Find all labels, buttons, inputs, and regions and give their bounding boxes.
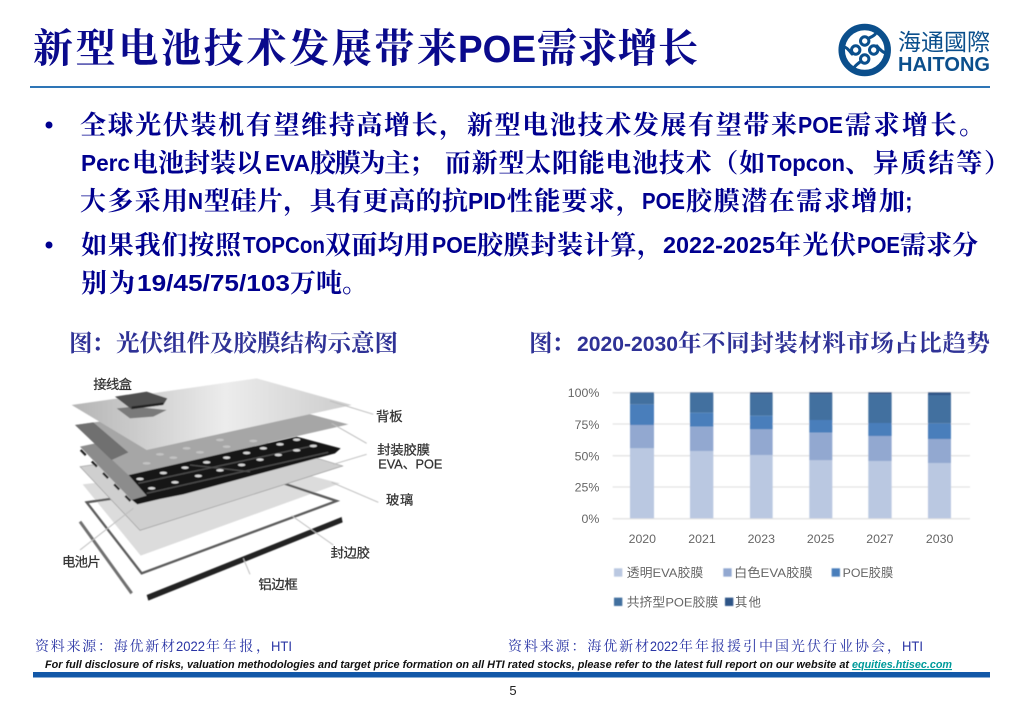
backsheet [72, 378, 352, 450]
diagram labels: 封边胶 [331, 545, 370, 561]
diagram labels: 接线盒 [93, 376, 132, 392]
bullet 2 [46, 230, 978, 298]
legend labels: 其他 [735, 595, 761, 609]
stacked bar chart [568, 386, 970, 609]
bullet 1: 而新型太阳能电池技术（如 [445, 148, 765, 178]
logo: Haitong: HAITONG [898, 54, 990, 76]
upper encapsulant film [75, 400, 348, 475]
x axis labels: 2027 [866, 532, 894, 546]
x axis labels: 2023 [748, 532, 775, 546]
source: left [35, 638, 292, 655]
bar 2025 [809, 392, 832, 518]
legend labels [627, 565, 893, 609]
bullet 2: 胶膜封装计算， [477, 231, 663, 261]
bullet 1: 胶膜潜在需求增加 [686, 187, 905, 216]
legend labels: 透明EVA胶膜 [627, 565, 703, 580]
y axis labels: 50% [575, 449, 599, 463]
source: right: 2022 [650, 638, 678, 654]
bullet 1 [46, 110, 1010, 217]
diagram labels: 背板 [376, 409, 403, 424]
bullet text block [46, 110, 1010, 298]
bullet 1: 型硅片，具有更高的抗 [204, 186, 468, 217]
logo: Haitong: 海通國際 [898, 29, 990, 55]
bullet 2: 双面均用 [325, 231, 430, 260]
bullet 1: 大多采用 [80, 187, 188, 216]
y axis labels: 75% [575, 418, 599, 432]
source: right: 年年报援引中国光伏行业协会， [679, 638, 901, 655]
source: left: 年年报， [206, 638, 270, 655]
x axis labels: 2021 [688, 532, 716, 546]
y axis labels: 100% [568, 386, 599, 400]
legend swatches [614, 568, 840, 606]
bullet 1: ; [905, 188, 913, 214]
diagram labels [62, 376, 442, 592]
bullet 1: Perc [81, 150, 130, 176]
bullet 2: 如果我们按照 [81, 231, 243, 260]
bar 2020 [630, 392, 654, 518]
bullet 2: 需求分 [900, 231, 978, 260]
bullet 2: 2022-2025 [663, 232, 775, 258]
edge seal [87, 477, 337, 573]
bullet 1: POE [798, 112, 843, 138]
heading: right figure [529, 329, 990, 357]
disclosure line: For full disclosure of risks, valuation methodologies and target price formation on all HTI rated stocks, please refer to the latest full report on our website at [45, 659, 850, 671]
legend labels: POE胶膜 [843, 565, 893, 580]
heading: right figure: 图： [529, 330, 575, 357]
grid lines [613, 393, 970, 519]
source: right: HTI [902, 638, 923, 654]
exploded diagram: PV module layers [62, 376, 442, 601]
bullet 1: PID [468, 188, 506, 214]
bullet 1: 需求增长。 [845, 111, 985, 140]
bullet 2: POE [857, 232, 900, 258]
chart labels [568, 386, 953, 609]
y axis labels: 0% [582, 512, 599, 526]
bullet 1: 电池封装以 [132, 149, 264, 178]
diagram labels: EVA、POE [378, 456, 442, 471]
bullet 1: 性能要求， [507, 187, 642, 217]
logo: Haitong [842, 27, 990, 76]
bullet 1: POE [642, 188, 685, 214]
heading: right figure: 年不同封装材料市场占比趋势 [678, 329, 990, 357]
page number: 5 [509, 683, 517, 698]
bar 2030 [928, 392, 951, 518]
leader lines [80, 401, 378, 574]
diagram labels: 电池片 [62, 555, 101, 570]
aluminium frame [80, 517, 343, 601]
bullet 1: 全球光伏装机有望维持高增长，新型电池技术发展有望带来 [80, 110, 797, 141]
source: left: HTI [271, 638, 292, 654]
bar 2023 [750, 392, 773, 518]
bar 2027 [868, 392, 892, 518]
bullet 1: N [188, 188, 203, 214]
heading: right figure: 2020-2030 [577, 333, 678, 356]
glass [83, 463, 340, 556]
y axis labels [568, 386, 599, 526]
source: left: 资料来源：海优新材 [35, 638, 175, 655]
bullet 1: EVA [265, 150, 310, 176]
bullet 2: 别为 [81, 269, 135, 298]
x axis labels: 2025 [807, 532, 834, 546]
bullet 2: POE [432, 232, 477, 258]
cell layer [80, 437, 341, 504]
lower encapsulant film [80, 440, 343, 530]
source: left: 2022 [176, 638, 205, 654]
legend labels: 白色EVA胶膜 [734, 565, 813, 580]
diagram labels: 玻璃 [386, 491, 413, 507]
disclosure line: equities.htisec.com [852, 659, 952, 671]
bar 2021 [690, 392, 713, 518]
x axis labels: 2030 [926, 532, 953, 546]
title: 新型电池技术发展带来 [33, 26, 457, 71]
diagram labels: 封装胶膜 [377, 441, 430, 457]
bullet 2: TOPCon [243, 232, 325, 258]
heading: left figure: 图： [69, 330, 115, 357]
bullet 1: Topcon [767, 150, 845, 176]
footer bar [33, 672, 990, 678]
diagram labels: 铝边框 [258, 577, 298, 592]
title: POE [458, 29, 536, 71]
legend labels: 共挤型POE胶膜 [627, 594, 718, 609]
bullet 2: 万吨。 [290, 269, 368, 298]
bullet 2: 19/45/75/103 [137, 270, 290, 296]
source: right: 资料来源：海优新材 [508, 638, 649, 655]
x axis labels [629, 532, 953, 546]
bullet 1: 胶膜为主； [310, 149, 435, 178]
junction box [115, 392, 167, 418]
x axis labels: 2020 [629, 532, 656, 546]
source: right [508, 638, 923, 655]
bullet 1: 、异质结等） [845, 149, 1010, 178]
heading: left figure: 光伏组件及胶膜结构示意图 [116, 329, 398, 357]
title [33, 26, 698, 71]
y axis labels: 25% [575, 480, 599, 494]
bullet 2: 年光伏 [775, 230, 856, 260]
title: 需求增长 [537, 26, 698, 71]
